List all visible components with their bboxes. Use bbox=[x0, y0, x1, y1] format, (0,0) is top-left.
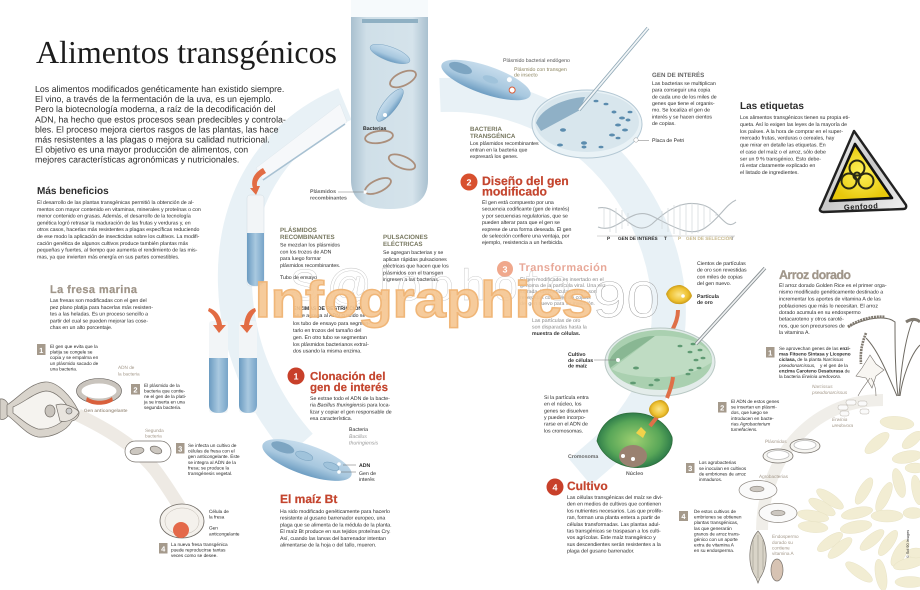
text cultivo: vos agrícolas. Este maíz transgénico y bbox=[567, 535, 656, 541]
step 3 text: células de fresa con el bbox=[188, 449, 235, 454]
icon: biohazard genfood label: Genfood bbox=[844, 201, 878, 212]
number badge 4: 4 bbox=[552, 482, 558, 492]
label: cultivo de células de maíz: de células bbox=[568, 358, 593, 364]
dna labels: GEN DE SELECCIÓN bbox=[686, 235, 733, 241]
text: pulsaciones eléctricas bbox=[383, 234, 450, 283]
label: célula de la fresa: la fresa bbox=[209, 515, 225, 520]
icon: plasmids in tube bbox=[363, 67, 418, 197]
text diseño: y por secuencias regulatorias, que se bbox=[482, 213, 568, 219]
icon: strawberry cell bbox=[160, 504, 204, 538]
intro text: El objetivo es una mayor producción de alimentos, con bbox=[35, 145, 248, 155]
text diseño: El gen está compuesto por una bbox=[482, 200, 554, 206]
text: pulsaciones eléctricas: ELÉCTRICAS bbox=[383, 240, 423, 248]
watermark: Infographics bbox=[255, 271, 593, 328]
text: si la partícula: rarse en el ADN de bbox=[544, 422, 588, 428]
text arroz dorado: dorado acumula en su endospermo bbox=[779, 310, 861, 316]
label: cromosoma: Cromosoma bbox=[568, 454, 598, 460]
text etiquetas: rá estar claramente explicado en bbox=[740, 163, 815, 169]
panel: el maíz bt: plaga que se alimenta de la médula de la planta. bbox=[280, 522, 392, 528]
step 1 text: El gen que evita que la bbox=[50, 344, 98, 349]
text: enzimas de restricción: ENZIMAS DE RESTRICCIÓN bbox=[293, 305, 362, 312]
label: cultivo de células de maíz bbox=[568, 352, 620, 370]
step 1: clonación del gen de interés bbox=[288, 368, 393, 422]
label: endospermo: vitamina A bbox=[772, 551, 794, 556]
step 1 text arroz: enzima Caroteno Desaturasa de bbox=[779, 368, 850, 373]
step 2 text: El plásmido de la bbox=[144, 383, 180, 388]
heading etiquetas: Las etiquetas bbox=[740, 101, 804, 112]
label: bacterias: Bacterias bbox=[363, 126, 386, 132]
step 2 text arroz: El ADN de estos genes bbox=[731, 399, 780, 404]
dna labels bbox=[607, 235, 734, 241]
heading cultivo: Cultivo bbox=[567, 479, 608, 493]
text: cientos de partículas: del gen nuevo. bbox=[697, 281, 731, 287]
intro text: bles. El proceso mejora ciertos rasgos de las plantas, las hace bbox=[35, 124, 279, 134]
step 3 text: fresa; se produce la bbox=[188, 465, 230, 470]
panel: el maíz bt bbox=[280, 492, 393, 548]
text diseño: de selección confiere una ventaja, por bbox=[482, 234, 570, 240]
text: plásmidos recombinantes: PLÁSMIDOS bbox=[280, 226, 317, 234]
text: más beneficios: genética logró retrasar la maduración de las frutas y verduras y, en bbox=[37, 220, 191, 226]
text: enzimas de restricción: tarlo en trozos del tamaño del bbox=[293, 328, 361, 334]
icon: rice plant bbox=[848, 317, 920, 396]
label: cultivo de células de maíz: Cultivo bbox=[568, 352, 586, 358]
intro text: mejores características agronómicas y nutricionales. bbox=[35, 155, 239, 165]
text: fresa intro: Las fresas son modificadas con el gen del bbox=[50, 298, 147, 304]
step 4 text: La nueva fresa transgénica bbox=[171, 542, 228, 547]
label: plásmidos recombinantes: recombinantes bbox=[310, 196, 347, 202]
step 4 text: puede reproducirse tantas bbox=[171, 548, 226, 553]
panel: las etiquetas bbox=[740, 101, 906, 212]
step 2 text arroz: dos, que luego se bbox=[731, 410, 768, 415]
text transformación: genoma de la partícula viral. Una vez bbox=[520, 283, 606, 289]
number badge 2: 2 bbox=[466, 178, 472, 188]
label: adn and gen de interés bbox=[337, 462, 376, 483]
step 3 badge arroz bbox=[686, 463, 694, 473]
text etiquetas: ser un 9 % transgénico. Esto debe- bbox=[740, 156, 821, 162]
intro text: más resistentes a las plagas o mejora su calidad nutricional. bbox=[35, 134, 270, 144]
text: si la partícula: en el núcleo, los bbox=[544, 402, 582, 408]
text cultivo: células transformadas. Las plantas adul- bbox=[567, 522, 660, 528]
icon: gold particle bbox=[666, 285, 692, 304]
arrow: gold to dish bbox=[671, 310, 678, 333]
heading: más beneficios: Más beneficios bbox=[37, 186, 109, 197]
label: adn and gen de interés: Gen de bbox=[359, 471, 376, 477]
dna labels: T bbox=[664, 236, 667, 241]
label: plásmido bacterial endógeno: Plásmido bacterial endógeno bbox=[503, 58, 570, 64]
step 1 text arroz: la bacteria Erwinia uredovora. bbox=[779, 374, 841, 379]
text: gen de interés: interés y se hacen cientos bbox=[652, 114, 712, 120]
text cultivo: plaga del gusano barrenador. bbox=[567, 549, 634, 555]
text: gen de interés bbox=[652, 71, 718, 127]
text: fresa intro: chas en un alto porcentaje. bbox=[50, 325, 112, 331]
text arroz dorado: incrementar los aportes de vitamina A de las bbox=[779, 296, 881, 302]
label: partícula de oro: Partícula bbox=[697, 294, 719, 300]
step 3 text arroz: de embriones de arroz bbox=[699, 472, 747, 477]
text: gen de interés: de copias. bbox=[652, 121, 676, 127]
step 3 text arroz: inmaduros. bbox=[699, 477, 722, 482]
text clonación: Se extrae todo el ADN de la bacte- bbox=[310, 396, 390, 402]
heading transformación: Transformación bbox=[519, 262, 607, 274]
intro text: Los alimentos modificados genéticamente han existido siempre. bbox=[35, 84, 284, 94]
step 1 badge bbox=[37, 344, 46, 355]
step 4 text: veces como se desee. bbox=[171, 553, 218, 558]
step 4 badge arroz bbox=[679, 511, 688, 521]
arrow: dish to cell bbox=[667, 377, 673, 398]
panel: el maíz bt: Así, cuando las larvas del barrenador intentan bbox=[280, 536, 386, 542]
intro text: Pero la biotecnología moderna, a raíz de la decodificación del bbox=[35, 104, 276, 114]
label: segunda bacteria: bacteria bbox=[145, 434, 162, 438]
heading diseño: Diseño del gen bbox=[482, 174, 569, 188]
text: cientos de partículas: de oro son revestidas bbox=[697, 268, 747, 274]
step 1 badge: 1 bbox=[39, 346, 43, 355]
step 3 text: Se infecta un cultivo de bbox=[188, 443, 237, 448]
text: enzimas de restricción: gen. En otro tubo se segmentan bbox=[293, 335, 367, 341]
text: pulsaciones eléctricas: ingresen a las bacterias. bbox=[383, 277, 439, 283]
step 4 text arroz: plantas transgénicas, bbox=[694, 520, 738, 525]
text: si la partícula: y pueden incorpo- bbox=[544, 415, 586, 421]
label: endospermo: Endospermo bbox=[772, 534, 799, 539]
text arroz dorado: nos, que son precursores de bbox=[779, 323, 845, 329]
label: endospermo: contiene bbox=[772, 546, 790, 550]
label: placa de petri bbox=[634, 138, 684, 144]
label: adn de la bacteria: ADN de bbox=[118, 365, 135, 370]
text: gen de interés: para conseguir una copia bbox=[652, 88, 710, 94]
text: enzimas de restricción: dos usando la misma enzima. bbox=[293, 348, 362, 354]
label: adn and gen de interés: ADN bbox=[359, 463, 370, 469]
two test tubes with arrows bbox=[208, 308, 257, 413]
heading arroz dorado: Arroz dorado bbox=[779, 268, 851, 282]
text: partículas disparadas: Las partículas de oro bbox=[532, 318, 581, 324]
text: gen de interés: Las bacterias se multiplican bbox=[652, 81, 716, 87]
label: bacteria bacillus: Bacteria bbox=[349, 427, 368, 433]
icon: agrobacteria bbox=[739, 480, 797, 522]
dna labels: GEN DE INTERÉS bbox=[618, 235, 658, 241]
icon: bacterium bacillus bbox=[258, 431, 356, 489]
text cultivo: sus descendientes serán resistentes a la bbox=[567, 542, 661, 548]
label: plásmidos recombinantes bbox=[310, 189, 364, 202]
dna labels: P bbox=[607, 236, 610, 241]
icon: petri dish maize cells bbox=[605, 328, 715, 396]
text: bacteria transgénica: BACTERIA bbox=[470, 126, 502, 133]
text cultivo: ran, forman una planta entera a partir de bbox=[567, 515, 660, 521]
step 1 text arroz: ciclasa, de la planta Narcissus bbox=[779, 357, 843, 362]
watermark bbox=[255, 261, 660, 328]
text arroz dorado: la vitamina A. bbox=[779, 330, 810, 336]
step 2 text: segunda bacteria. bbox=[144, 405, 181, 410]
rice grains backdrop bbox=[796, 415, 920, 590]
step 4 badge bbox=[159, 543, 168, 554]
label: cultivo de células de maíz: de maíz bbox=[568, 364, 587, 370]
text: fresa intro: tes a las heladas. Es un proceso sencillo a bbox=[50, 312, 148, 318]
icon: rice plasmids bbox=[763, 439, 820, 463]
label: placa de petri: Placa de Petri bbox=[652, 138, 684, 144]
band: rice process path bbox=[762, 400, 883, 530]
step 1 text: platija se congele se bbox=[50, 350, 93, 355]
label: plásmido con transgen: de insecto bbox=[514, 72, 538, 78]
icon: plasmid with gene bbox=[76, 378, 122, 405]
text cultivo: Las células transgénicas del maíz se divi- bbox=[567, 495, 663, 501]
text: si la partícula: Si la partícula entra bbox=[544, 395, 589, 401]
credit: © Sol 90 Images bbox=[906, 530, 910, 558]
label: agrobacterias: Agrobacterias bbox=[759, 474, 789, 479]
text etiquetas: el caso del maíz o el arroz, sólo debe bbox=[740, 150, 826, 156]
step 3 text arroz: Los agrobacterias bbox=[699, 460, 737, 465]
text cultivo: los nutrientes necesarios. Las que prolife- bbox=[567, 508, 663, 514]
step 2 text: ne el gen de la plati- bbox=[144, 394, 187, 399]
number badge 1: 1 bbox=[293, 372, 299, 382]
text: plásmidos recombinantes: Se mezclan los plásmidos bbox=[280, 242, 340, 248]
label: bacteria bacillus: thuringiensis bbox=[349, 440, 379, 446]
text arroz dorado: nismo modificado genéticamente destinado a bbox=[779, 290, 883, 296]
intro text: ADN, ha hecho que estos procesos sean predecibles y controla- bbox=[35, 114, 286, 124]
label: adn and gen de interés: interés bbox=[359, 477, 375, 483]
tweezers pipette bbox=[696, 268, 765, 344]
label: célula de la fresa: Célula de bbox=[209, 509, 229, 514]
step 2 text: bacteria que contie- bbox=[144, 388, 186, 394]
label: segunda bacteria: Segunda bbox=[145, 428, 164, 433]
heading diseño: modificado bbox=[482, 184, 547, 198]
heading clonación: Clonación del bbox=[310, 371, 385, 383]
text: partículas disparadas: son disparadas hasta la bbox=[532, 325, 587, 331]
text clonación: ria Bacillus thuringiensis para loca- bbox=[310, 403, 390, 409]
step 1 badge arroz: 1 bbox=[768, 348, 772, 358]
text: pulsaciones eléctricas: plásmidos con el transgen bbox=[383, 270, 443, 276]
step 2 text arroz: introducen en bacte- bbox=[731, 416, 774, 421]
step 4 badge arroz: 4 bbox=[681, 512, 686, 521]
text: cientos de partículas: con miles de copias bbox=[697, 274, 743, 280]
text: enzimas de restricción: los plásmidos bacterianos extraí- bbox=[293, 342, 369, 348]
text: fresa intro: pez plano platija para hacerlas más resisten- bbox=[50, 305, 153, 311]
text: bacteria transgénica: Los plásmidos recombinantes bbox=[470, 141, 539, 147]
text: gen de interés: de cada uno de los miles de bbox=[652, 94, 717, 100]
label: erwinia: Erwinia bbox=[832, 417, 848, 422]
panel: la fresa marina bbox=[0, 284, 241, 558]
label: gen anticongelante cell: Gen bbox=[209, 526, 218, 530]
text transformación: lograda, las partículas de oro son bbox=[520, 289, 597, 295]
text: fresa intro: partir del cual se pueden mejorar las cose- bbox=[50, 318, 148, 324]
label: gen anticongelante: Gen anticongelante bbox=[84, 408, 128, 413]
step 2 badge: 2 bbox=[133, 386, 138, 394]
step 4 text arroz: extra de vitamina A bbox=[694, 543, 735, 548]
text: enzimas de restricción: los tubo de ensayo para segmen- bbox=[293, 321, 370, 327]
text transformación: revestidas con miles de copias bbox=[520, 295, 591, 301]
text etiquetas: que mirar en detalle las etiquetas. En bbox=[740, 142, 826, 148]
icon: transgenic bacterium bbox=[437, 51, 535, 109]
step 4 text arroz: embriones se obtienen bbox=[694, 515, 742, 520]
text: pulsaciones eléctricas: PULSACIONES bbox=[383, 234, 428, 241]
step 2 badge arroz: 2 bbox=[720, 404, 724, 412]
text: más beneficios: cación genética de algunos cultivos produce también plantas más bbox=[37, 241, 189, 247]
step 2 text arroz: se insertan en plásmi- bbox=[731, 405, 777, 410]
text: pulsaciones eléctricas: eléctricas que hacen que los bbox=[383, 264, 449, 270]
step 2 text arroz: tumefaciens. bbox=[731, 427, 758, 432]
text clonación: esa característica. bbox=[310, 416, 352, 422]
step 4 text arroz: en su endosperma. bbox=[694, 548, 734, 553]
text: partículas disparadas: muestra de células. bbox=[532, 331, 581, 337]
text: pulsaciones eléctricas: Se agregan bacterias y se bbox=[383, 250, 443, 256]
text transformación: del gen nuevo para su inserción. bbox=[520, 301, 595, 307]
step 3 text: se integra al ADN de la bbox=[188, 460, 236, 465]
step 2 text arroz: rias Agrobacterium bbox=[731, 421, 770, 426]
watermark: S@lophoto bbox=[290, 261, 570, 310]
label: endospermo: dorado su bbox=[772, 540, 793, 545]
label: plásmidos: Plásmidos bbox=[765, 439, 787, 444]
step 1 text arroz: y el gen de la bbox=[820, 363, 848, 368]
text transformación: El gen modificado es insertado en el bbox=[520, 277, 604, 283]
text diseño: exprese de una forma deseada. El gen bbox=[482, 227, 572, 233]
step 2 text: ja se inserta en una bbox=[143, 400, 185, 404]
watermark: 90 bbox=[593, 271, 660, 328]
label: narcissus: Narcissus bbox=[812, 384, 833, 389]
text etiquetas: mercado frutas, verduras o cereales, hay bbox=[740, 136, 835, 142]
background cycle ring bbox=[235, 95, 669, 472]
step 4 text arroz: las que generarán bbox=[694, 526, 732, 531]
step 3: transformación bbox=[497, 261, 607, 307]
text: enzimas de restricción: Se le agrega al ADN cuando se bbox=[293, 313, 365, 319]
text: más beneficios: de ese modo la aplicación de insecticidas sobre los cultivos. La modifi- bbox=[37, 234, 200, 240]
icon: bacteria in tube bbox=[368, 40, 412, 125]
panel: el maíz bt: resistente al gusano barrenador europeo, una bbox=[280, 516, 385, 522]
label: adn de la bacteria: la bacteria bbox=[118, 372, 140, 376]
step 3 badge: 3 bbox=[178, 444, 182, 454]
step 4 text arroz: génico con un aporte bbox=[694, 537, 738, 542]
text cultivo: den en medios de cultivos que contienen bbox=[567, 502, 661, 508]
text arroz dorado: betacaroteno y otros caroté- bbox=[779, 317, 844, 323]
step 4 badge: 4 bbox=[161, 544, 166, 554]
dna helix bbox=[597, 200, 736, 241]
step 3 badge arroz: 3 bbox=[688, 464, 692, 473]
text: bacteria transgénica: expresará los genes. bbox=[470, 154, 518, 160]
label: partícula de oro: de oro bbox=[697, 300, 713, 306]
text diseño: pueden alterar para que el gen se bbox=[482, 220, 560, 226]
panel: el maíz bt: alimentarse de la hoja o del tallo, mueren. bbox=[280, 542, 376, 548]
text: enzimas de restricción bbox=[293, 305, 371, 354]
panel: el maíz bt: Ha sido modificado genéticamente para hacerlo bbox=[280, 509, 390, 515]
text etiquetas: Los alimentos transgénicos tienen su propia eti- bbox=[740, 115, 850, 121]
step 4 text arroz: granos de arroz trans- bbox=[694, 531, 741, 536]
step 1 badge arroz bbox=[766, 347, 774, 358]
text etiquetas: el listado de ingredientes. bbox=[740, 170, 799, 176]
step 1 text: copia y se empalma en bbox=[50, 355, 99, 360]
text: bacteria transgénica: entran en la bacteria que bbox=[470, 148, 528, 154]
text: bacteria transgénica: TRANSGÉNICA bbox=[470, 132, 516, 140]
step 3 text: transgénesis vegetal. bbox=[188, 471, 232, 476]
text: más beneficios: menor contenido en grasas. Además, el desarrollo de la tecnología bbox=[37, 214, 191, 220]
dna labels: T bbox=[731, 236, 734, 241]
label: bacteria bacillus: Bacillus bbox=[349, 434, 367, 440]
number badge 3: 3 bbox=[502, 264, 508, 274]
text etiquetas: queta. Así lo exigen las leyes de la mayoría de bbox=[740, 122, 847, 128]
step 1 text arroz: pseudonarcissus, bbox=[778, 363, 815, 368]
text: plásmidos recombinantes: para luego formar bbox=[280, 256, 321, 262]
panel: más beneficios bbox=[37, 186, 202, 260]
text arroz dorado: poblaciones que más lo necesitan. El arroz bbox=[779, 304, 878, 310]
step 3 text: gen anticongelante. Éste bbox=[188, 453, 240, 459]
panel: arroz dorado bbox=[679, 268, 920, 590]
text diseño: secuencia codificante (gen de interés) bbox=[482, 207, 570, 213]
step 3 badge bbox=[176, 443, 184, 454]
text: plásmidos recombinantes: plásmidos recombinantes. bbox=[280, 263, 340, 269]
text: plásmidos recombinantes bbox=[280, 226, 341, 269]
step 4: cultivo bbox=[546, 478, 664, 555]
label: núcleo: Núcleo bbox=[626, 471, 643, 477]
label: plásmido con transgen: Plásmido con transgen bbox=[514, 67, 567, 73]
text etiquetas: los países. A la hora de comprar en el super- bbox=[740, 129, 843, 135]
text: más beneficios: pequeñas y fuertes, al tiempo que aumenta el rendimiento de las mis- bbox=[37, 248, 198, 254]
panel: el maíz bt: El maíz Bt produce en sus tejidos proteínas Cry. bbox=[280, 529, 391, 535]
icon: flatfish bbox=[0, 382, 79, 437]
label: tubo de ensayo: Tubo de ensayo bbox=[280, 275, 317, 281]
icon: narcissus flower bbox=[856, 355, 884, 396]
text: cientos de partículas: Cientos de partículas bbox=[697, 261, 746, 267]
icon: rice grain section bbox=[750, 531, 783, 583]
text clonación: lizar y copiar el gen responsable de bbox=[310, 409, 392, 415]
label: gen anticongelante cell: anticongelante bbox=[209, 532, 240, 536]
text: plásmidos recombinantes: RECOMBINANTES bbox=[280, 234, 335, 241]
text: gen de interés: mo. Se localiza el gen de bbox=[652, 108, 710, 114]
icon: plant cell bbox=[597, 400, 672, 468]
title: Alimentos transgénicos bbox=[36, 34, 337, 70]
large test tube bbox=[351, 0, 428, 209]
pipette and first test tube bbox=[247, 104, 347, 286]
icon: second bacterium bbox=[125, 441, 171, 462]
panel: el maíz bt: El maíz Bt bbox=[280, 492, 337, 506]
text: pulsaciones eléctricas: aplican rápidas pulsaciones bbox=[383, 257, 447, 263]
heading clonación: gen de interés bbox=[310, 382, 388, 394]
step 2 badge bbox=[131, 384, 140, 394]
text: si la partícula: genes se disuelven bbox=[544, 408, 589, 414]
step 3 text arroz: se inoculan en cultivos bbox=[699, 466, 747, 471]
step 1 text: una bacteria. bbox=[50, 366, 77, 371]
text diseño: ejemplo, resistencia a un herbicida. bbox=[482, 240, 563, 246]
step 1 text arroz: mas Fitoeno Sintasa y Licopeno bbox=[779, 352, 851, 357]
dna labels: P bbox=[678, 236, 681, 241]
step 2 badge arroz bbox=[718, 402, 726, 412]
text: bacteria transgénica bbox=[470, 126, 540, 160]
label: narcissus: pseudonarcissus bbox=[811, 390, 848, 395]
label: erwinia: uredovora bbox=[832, 423, 854, 428]
text: gen de interés: GEN DE INTERÉS bbox=[652, 71, 704, 79]
band: fresa process path bbox=[78, 415, 185, 515]
text cultivo: tas transgénicas se traspasan a los culti- bbox=[567, 528, 661, 534]
text: gen de interés: genes que tiene el organis- bbox=[652, 101, 715, 107]
icon: erwinia bacteria bbox=[838, 400, 869, 416]
text: más beneficios: mas, ya que invierten más energía en sus partes comestibles. bbox=[37, 254, 179, 260]
icon: biohazard genfood label bbox=[820, 131, 906, 212]
text arroz dorado: El arroz dorado Golden Rice es el primer orga- bbox=[779, 283, 887, 289]
text: más beneficios: mentos con mayor contenido en vitaminas, minerales y proteínas o con bbox=[37, 207, 201, 213]
text: más beneficios: El desarrollo de las plantas transgénicas permitió la obtención de al- bbox=[37, 200, 194, 206]
text: si la partícula: los cromosomas. bbox=[544, 428, 583, 434]
icon: petri dish with colonies bbox=[532, 28, 648, 158]
text: plásmidos recombinantes: con los trozos de ADN bbox=[280, 249, 332, 255]
step 1 text: un plásmido sacado de bbox=[50, 361, 99, 366]
intro text: El vino, a través de la fermentación de la uva, es un ejemplo. bbox=[35, 94, 273, 104]
label: plásmidos recombinantes: Plásmidos bbox=[310, 189, 336, 195]
heading: la fresa marina: La fresa marina bbox=[50, 284, 138, 296]
step 2: diseño del gen modificado bbox=[460, 174, 573, 246]
step 4 text arroz: De estos cultivos de bbox=[694, 509, 736, 514]
text: más beneficios: otros casos, hacerlas más resistentes a plagas específicas reduciendo bbox=[37, 227, 199, 233]
step 1 text arroz: Se aprovechan genes de las enzi- bbox=[779, 346, 850, 351]
